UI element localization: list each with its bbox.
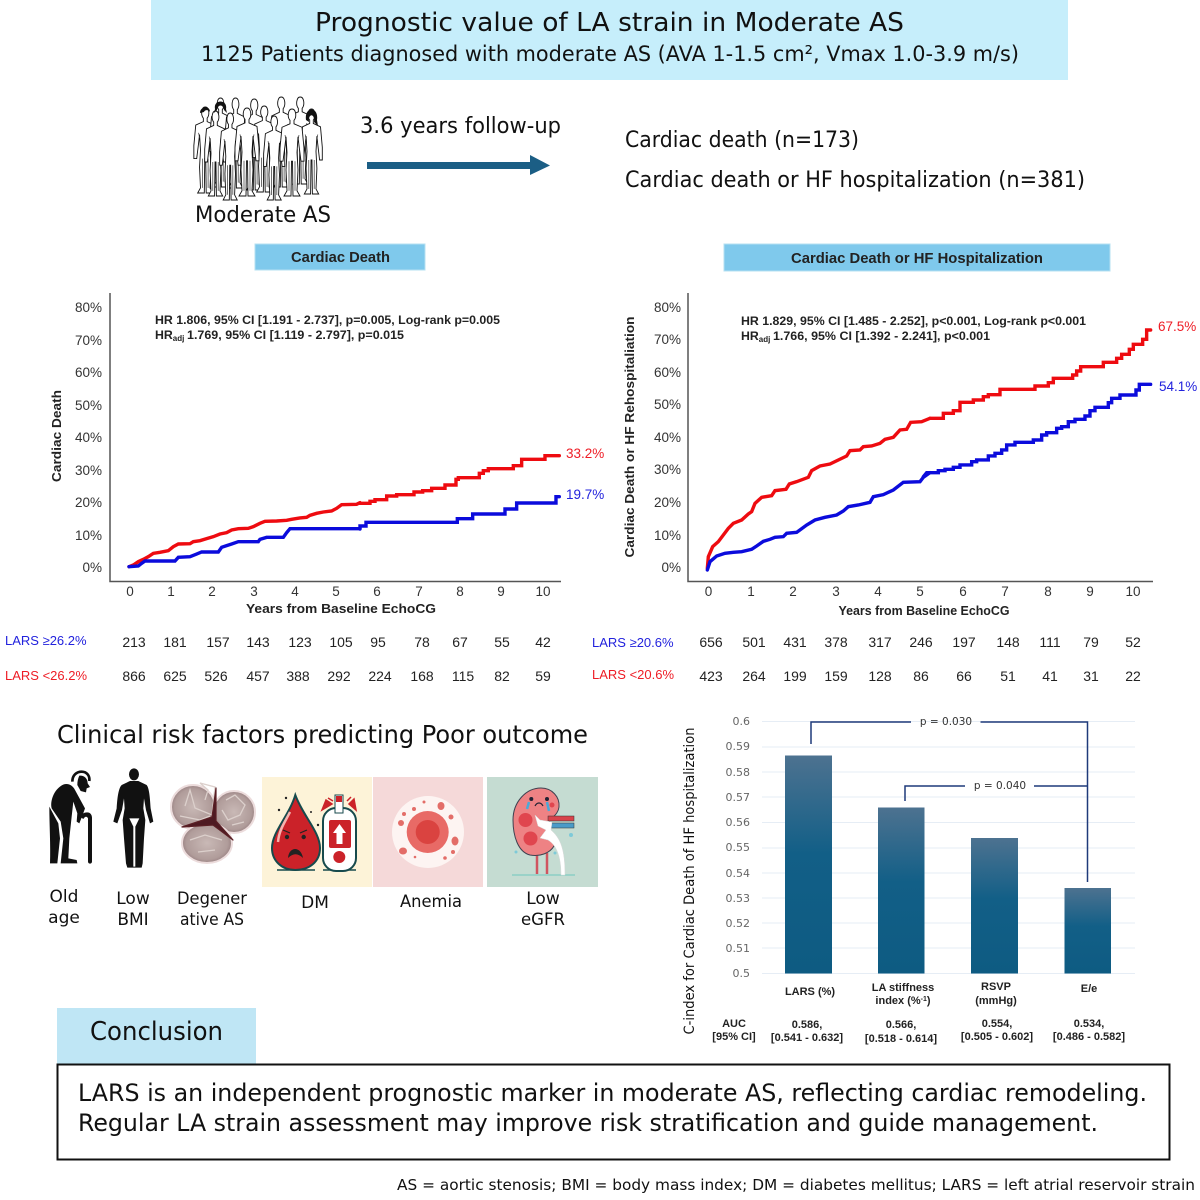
chart: cardiac death or HF hospitalization Kaplan-Meier: 8 xyxy=(1044,584,1052,599)
AUC row: 0.554, xyxy=(982,1018,1012,1030)
icon: old age xyxy=(49,772,92,864)
y tick labels: 0.51 xyxy=(726,942,750,955)
title: Prognostic value of LA strain in Moderate AS xyxy=(315,8,904,38)
grid lines xyxy=(762,722,1135,974)
chart: cardiac death Kaplan-Meier: 70% xyxy=(75,333,102,348)
AUC row: AUC xyxy=(722,1018,746,1030)
risk table: cardiac death or HF hospitalization xyxy=(592,634,1141,684)
x axis title: Years from Baseline EchoCG xyxy=(246,601,436,616)
conclusion text box: LARS is an independent prognostic marker in moderate AS, reflecting cardiac remodeling. xyxy=(78,1079,1147,1107)
risk table: cardiac death: 213 xyxy=(122,634,146,650)
heading: Cardiac Death or HF Hospitalization xyxy=(724,244,1110,271)
chart: cardiac death or HF hospitalization Kaplan-Meier: 80% xyxy=(654,300,681,315)
chart: cardiac death or HF hospitalization Kaplan-Meier: 4 xyxy=(874,584,882,599)
heading: Cardiac Death or HF Hospitalization: Cardiac Death or HF Hospitalization xyxy=(791,251,1043,267)
y axis title: Cardiac Death or HF Rehospitaliation xyxy=(623,316,637,558)
risk table: cardiac death: 157 xyxy=(206,634,230,650)
curve: LARS below cutoff xyxy=(129,456,559,567)
risk table: cardiac death or HF hospitalization: 197 xyxy=(952,634,976,650)
hazard ratio text: adj xyxy=(173,334,184,343)
risk table: cardiac death or HF hospitalization: 656 xyxy=(699,634,723,650)
risk factor labels: DM xyxy=(301,893,329,913)
risk table: cardiac death or HF hospitalization: 111 xyxy=(1039,634,1061,650)
chart: cardiac death or HF hospitalization Kaplan-Meier: 7 xyxy=(1001,584,1009,599)
risk table: cardiac death or HF hospitalization: 317 xyxy=(868,634,892,650)
AUC row: [0.518 - 0.614] xyxy=(865,1033,937,1045)
heading: Cardiac Death xyxy=(255,244,425,270)
hazard ratio text: HR 1.806, 95% CI [1.191 - 2.737], p=0.005, Log-rank p=0.005 xyxy=(155,313,500,327)
risk table: cardiac death or HF hospitalization: 86 xyxy=(913,668,929,684)
risk factor labels xyxy=(48,887,565,930)
risk table: cardiac death: 625 xyxy=(163,668,187,684)
chart: cardiac death Kaplan-Meier: 10 xyxy=(535,584,551,599)
chart: cardiac death Kaplan-Meier: 40% xyxy=(75,430,102,445)
icon: low BMI xyxy=(113,768,153,868)
chart: cardiac death Kaplan-Meier: 0 xyxy=(126,584,134,599)
chart: cardiac death Kaplan-Meier: 3 xyxy=(250,584,258,599)
bar: E/e xyxy=(1064,888,1111,974)
risk factor labels: BMI xyxy=(117,910,149,930)
chart: cardiac death Kaplan-Meier: 50% xyxy=(75,398,102,413)
chart: cardiac death or HF hospitalization Kaplan-Meier: 1 xyxy=(747,584,755,599)
end label blue: 19.7% xyxy=(566,487,604,502)
y tick labels: 0.52 xyxy=(726,917,750,930)
risk factor labels: Anemia xyxy=(400,892,462,912)
y tick labels: 0.59 xyxy=(726,740,750,753)
chart: cardiac death Kaplan-Meier: 6 xyxy=(373,584,381,599)
conclusion text box: Regular LA strain assessment may improve risk stratification and guide management. xyxy=(78,1109,1098,1137)
curve: LARS above cutoff xyxy=(707,384,1151,570)
label: follow-up: 3.6 years follow-up xyxy=(360,113,561,139)
risk table: cardiac death: 388 xyxy=(286,668,310,684)
category labels: ) xyxy=(927,995,931,1007)
risk table: cardiac death or HF hospitalization: 501 xyxy=(742,634,766,650)
risk table: cardiac death: 42 xyxy=(535,634,551,650)
category labels: E/e xyxy=(1081,983,1097,995)
end label red: 67.5% xyxy=(1158,319,1196,334)
risk table: cardiac death: 292 xyxy=(327,668,351,684)
category labels: -1 xyxy=(921,996,927,1003)
bar: LARS xyxy=(785,756,832,974)
chart: cardiac death Kaplan-Meier: 20% xyxy=(75,495,102,510)
end label red: 33.2% xyxy=(566,446,604,461)
risk factor labels: eGFR xyxy=(521,910,565,930)
chart: cardiac death Kaplan-Meier: 2 xyxy=(208,584,216,599)
risk table: cardiac death: 67 xyxy=(452,634,468,650)
chart: cardiac death or HF hospitalization Kaplan-Meier: 10 xyxy=(1125,584,1141,599)
risk table: cardiac death: 78 xyxy=(414,634,430,650)
risk table: cardiac death or HF hospitalization: 199 xyxy=(783,668,807,684)
risk factor labels: Degener xyxy=(177,889,247,909)
risk table: cardiac death or HF hospitalization: 378 xyxy=(824,634,848,650)
risk table: cardiac death: 59 xyxy=(535,668,551,684)
hazard ratio text: 1.766, 95% CI [1.392 - 2.241], p<0.001 xyxy=(773,329,990,343)
risk table: cardiac death: 105 xyxy=(329,634,353,650)
risk table: cardiac death or HF hospitalization: 31 xyxy=(1083,668,1099,684)
chart: cardiac death Kaplan-Meier: 1 xyxy=(167,584,175,599)
p-value bracket LARS vs E/e: p = 0.030 xyxy=(920,716,972,728)
risk factor labels: ative AS xyxy=(180,910,244,930)
chart: cardiac death Kaplan-Meier: 80% xyxy=(75,300,102,315)
AUC row: 0.534, xyxy=(1074,1018,1104,1030)
AUC row: [0.541 - 0.632] xyxy=(771,1032,843,1044)
chart: cardiac death or HF hospitalization Kaplan-Meier: 0% xyxy=(661,560,681,575)
AUC row: [95% CI] xyxy=(712,1031,756,1043)
chart: cardiac death Kaplan-Meier: 4 xyxy=(291,584,299,599)
risk table: cardiac death: 143 xyxy=(246,634,270,650)
heading: clinical risk factors: Clinical risk factors predicting Poor outcome xyxy=(57,720,588,749)
AUC row: 0.586, xyxy=(792,1019,822,1031)
outcomes: Cardiac death or HF hospitalization (n=381) xyxy=(625,167,1085,193)
icon: degenerative valve xyxy=(171,783,255,863)
conclusion tab xyxy=(57,1008,256,1064)
chart: cardiac death or HF hospitalization Kaplan-Meier: 10% xyxy=(654,528,681,543)
y tick labels xyxy=(726,715,750,980)
risk table: cardiac death: LARS ≥26.2% xyxy=(5,633,87,648)
hazard ratio text: 1.769, 95% CI [1.119 - 2.797], p=0.015 xyxy=(187,328,404,342)
curve: LARS above cutoff xyxy=(129,497,559,567)
subtitle: 1125 Patients diagnosed with moderate AS (AVA 1-1.5 cm², Vmax 1.0-3.9 m/s) xyxy=(201,42,1019,67)
risk factor labels: Old xyxy=(50,887,78,907)
chart: cardiac death Kaplan-Meier: 5 xyxy=(332,584,340,599)
hazard ratio text: HR xyxy=(741,329,759,343)
risk table: cardiac death: 457 xyxy=(246,668,270,684)
conclusion tab: Conclusion xyxy=(90,1017,223,1047)
risk table: cardiac death or HF hospitalization: 159 xyxy=(824,668,848,684)
p-value bracket LARS vs E/e xyxy=(811,716,1088,882)
chart: cardiac death or HF hospitalization Kaplan-Meier: 30% xyxy=(654,462,681,477)
risk table: cardiac death or HF hospitalization: LARS <20.6% xyxy=(592,667,674,682)
curve: LARS below cutoff xyxy=(707,330,1151,568)
y tick labels: 0.55 xyxy=(726,841,750,854)
title banner xyxy=(151,0,1068,80)
category labels xyxy=(785,981,1097,1007)
hazard ratio text: adj xyxy=(759,335,770,344)
icon: kidney xyxy=(487,777,598,887)
y tick labels: 0.54 xyxy=(726,867,750,880)
label: Moderate AS: Moderate AS xyxy=(195,202,331,228)
y tick labels: 0.5 xyxy=(732,967,750,980)
risk table: cardiac death: 866 xyxy=(122,668,146,684)
hazard ratio text: HR xyxy=(155,328,173,342)
risk table: cardiac death: 115 xyxy=(452,668,474,684)
risk table: cardiac death or HF hospitalization: 66 xyxy=(956,668,972,684)
risk table: cardiac death or HF hospitalization: 79 xyxy=(1083,634,1099,650)
heading: Cardiac Death: Cardiac Death xyxy=(291,250,390,266)
chart: cardiac death Kaplan-Meier xyxy=(49,293,604,616)
icon: anemia xyxy=(373,777,483,887)
chart: cardiac death or HF hospitalization Kaplan-Meier: 0 xyxy=(705,584,712,599)
chart: cardiac death or HF hospitalization Kaplan-Meier xyxy=(623,293,1197,618)
chart: cardiac death Kaplan-Meier: 9 xyxy=(497,584,505,599)
chart: cardiac death or HF hospitalization Kaplan-Meier: 40% xyxy=(654,430,681,445)
chart: cardiac death Kaplan-Meier: 8 xyxy=(456,584,464,599)
risk factor labels: Low xyxy=(116,889,150,909)
category labels: LARS (%) xyxy=(785,986,835,998)
risk table: cardiac death: 168 xyxy=(410,668,434,684)
arrow: follow-up xyxy=(367,155,550,175)
AUC row: [0.486 - 0.582] xyxy=(1053,1031,1125,1043)
risk table: cardiac death: 224 xyxy=(368,668,392,684)
chart: cardiac death or HF hospitalization Kaplan-Meier: 9 xyxy=(1086,584,1094,599)
hazard ratio text xyxy=(741,314,1086,344)
y tick labels: 0.58 xyxy=(726,766,750,779)
risk table: cardiac death: 55 xyxy=(494,634,510,650)
risk table: cardiac death: LARS <26.2% xyxy=(5,668,87,683)
risk table: cardiac death: 82 xyxy=(494,668,510,684)
chart: cardiac death or HF hospitalization Kaplan-Meier: 70% xyxy=(654,332,681,347)
p-value bracket LA stiffness vs E/e: p = 0.040 xyxy=(974,780,1026,792)
risk table: cardiac death or HF hospitalization: 246 xyxy=(909,634,933,650)
chart: cardiac death Kaplan-Meier: 60% xyxy=(75,365,102,380)
risk table: cardiac death or HF hospitalization: 51 xyxy=(1000,668,1016,684)
y axis title: C-index for Cardiac Death of HF hospitalization xyxy=(682,728,698,1034)
y tick labels: 0.56 xyxy=(726,816,750,829)
chart: cardiac death or HF hospitalization Kaplan-Meier: 3 xyxy=(832,584,840,599)
outcomes xyxy=(625,127,1085,193)
risk table: cardiac death or HF hospitalization: LARS ≥20.6% xyxy=(592,635,674,650)
p-value bracket LA stiffness vs E/e xyxy=(905,780,1088,801)
bar: LA stiffness xyxy=(878,808,924,974)
AUC row: 0.566, xyxy=(886,1019,916,1031)
risk table: cardiac death or HF hospitalization: 431 xyxy=(783,634,807,650)
risk table: cardiac death or HF hospitalization: 22 xyxy=(1125,668,1141,684)
risk table: cardiac death or HF hospitalization: 264 xyxy=(742,668,766,684)
risk factor labels: Low xyxy=(526,889,560,909)
risk table: cardiac death: 123 xyxy=(288,634,312,650)
risk table: cardiac death: 526 xyxy=(204,668,228,684)
icon: diabetes xyxy=(262,777,372,887)
chart: cardiac death or HF hospitalization Kaplan-Meier: 50% xyxy=(654,397,681,412)
AUC row xyxy=(712,1018,1125,1045)
outcomes: Cardiac death (n=173) xyxy=(625,127,859,153)
icon: patient group xyxy=(194,97,322,200)
y axis title: Cardiac Death xyxy=(49,390,64,482)
risk table: cardiac death: 95 xyxy=(370,634,386,650)
chart: cardiac death Kaplan-Meier: 7 xyxy=(415,584,423,599)
end label blue: 54.1% xyxy=(1159,379,1197,394)
category labels: (mmHg) xyxy=(975,995,1017,1007)
risk table: cardiac death or HF hospitalization: 148 xyxy=(996,634,1020,650)
conclusion text box xyxy=(58,1064,1170,1160)
chart: cardiac death Kaplan-Meier: 10% xyxy=(75,528,102,543)
footnote: AS = aortic stenosis; BMI = body mass index; DM = diabetes mellitus; LARS = left atrial reservoir strain xyxy=(397,1176,1195,1194)
AUC row: [0.505 - 0.602] xyxy=(961,1031,1033,1043)
chart: cardiac death or HF hospitalization Kaplan-Meier: 5 xyxy=(916,584,924,599)
y tick labels: 0.53 xyxy=(726,892,750,905)
category labels: LA stiffness xyxy=(872,982,934,994)
risk table: cardiac death or HF hospitalization: 41 xyxy=(1042,668,1058,684)
category labels: RSVP xyxy=(981,981,1011,993)
chart: cardiac death Kaplan-Meier: 30% xyxy=(75,463,102,478)
category labels: index (% xyxy=(875,995,921,1007)
risk table: cardiac death or HF hospitalization: 128 xyxy=(868,668,892,684)
x axis title: Years from Baseline EchoCG xyxy=(838,604,1010,618)
risk table: cardiac death: 181 xyxy=(163,634,187,650)
risk factor labels: age xyxy=(48,908,80,928)
chart: C-index bars xyxy=(682,715,1135,1045)
chart: cardiac death or HF hospitalization Kaplan-Meier: 6 xyxy=(959,584,967,599)
risk table: cardiac death xyxy=(5,633,551,684)
hazard ratio text xyxy=(155,313,500,343)
hazard ratio text: HR 1.829, 95% CI [1.485 - 2.252], p<0.001, Log-rank p<0.001 xyxy=(741,314,1086,328)
risk table: cardiac death or HF hospitalization: 52 xyxy=(1125,634,1141,650)
y tick labels: 0.57 xyxy=(726,791,750,804)
y tick labels: 0.6 xyxy=(732,715,750,728)
chart: cardiac death or HF hospitalization Kaplan-Meier: 60% xyxy=(654,365,681,380)
chart: cardiac death or HF hospitalization Kaplan-Meier: 20% xyxy=(654,495,681,510)
bar: RSVP xyxy=(971,838,1018,974)
chart: cardiac death Kaplan-Meier: 0% xyxy=(82,560,102,575)
chart: cardiac death or HF hospitalization Kaplan-Meier: 2 xyxy=(789,584,797,599)
risk table: cardiac death or HF hospitalization: 423 xyxy=(699,668,723,684)
